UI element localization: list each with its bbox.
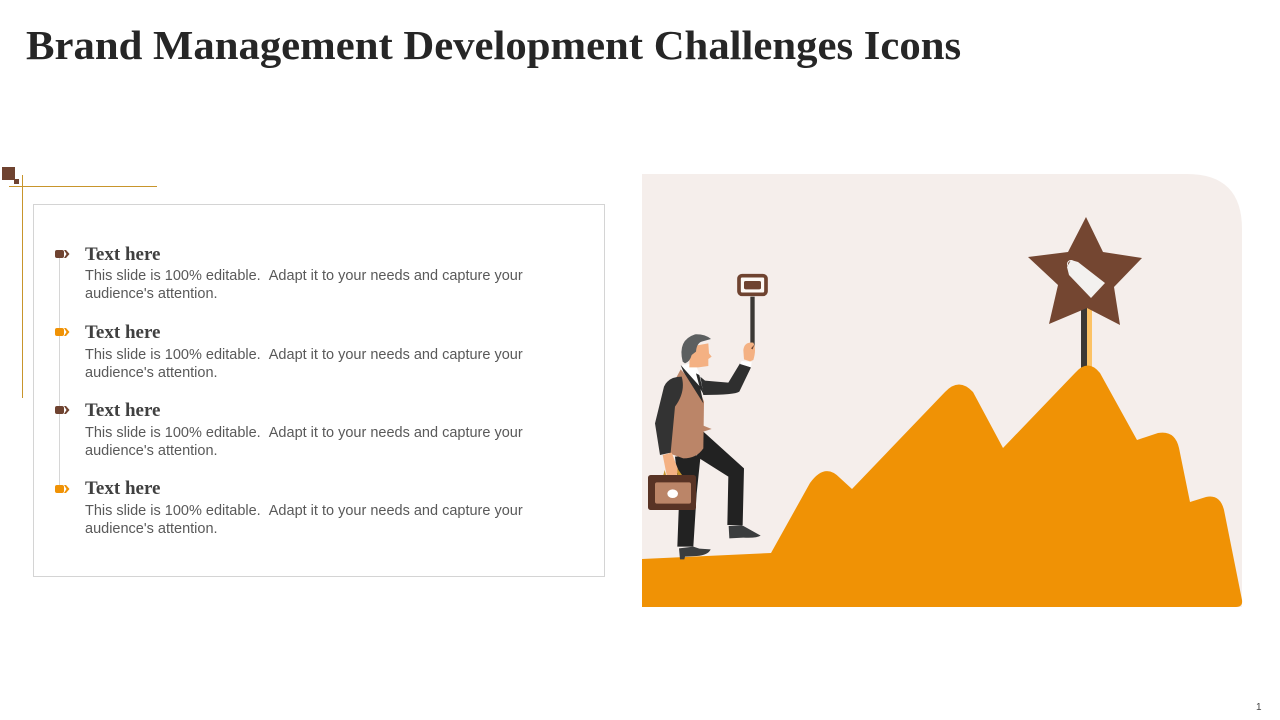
cuff <box>740 361 752 367</box>
item 4 text: This slide is 100% editable. Adapt it to your needs and capture your <box>85 503 523 519</box>
item 3 text <box>85 425 523 459</box>
title: Brand Management Development Challenges Icons <box>26 22 961 68</box>
raised hand <box>743 343 755 361</box>
bullet icon 1 <box>55 250 70 258</box>
item 1 heading: Text here <box>85 244 160 265</box>
item 1 text: audience's attention. <box>85 286 218 302</box>
front leg <box>697 432 744 525</box>
vest <box>668 369 704 458</box>
illustration background panel <box>642 174 1242 607</box>
back leg <box>675 455 701 547</box>
item 4 text: audience's attention. <box>85 521 218 537</box>
raised arm <box>698 363 751 395</box>
item 4 heading: Text here <box>85 478 160 499</box>
corner accent decoration <box>2 167 157 398</box>
star flag pole <box>1081 305 1092 375</box>
item 2 text: audience's attention. <box>85 365 218 381</box>
hair <box>681 334 711 363</box>
item 2 heading: Text here <box>85 322 160 343</box>
item 1 text: This slide is 100% editable. Adapt it to your needs and capture your <box>85 268 523 284</box>
businessman holding sign and briefcase <box>648 276 766 559</box>
bullet icon 2 <box>55 328 70 336</box>
front shoe <box>729 525 761 538</box>
item 2 text <box>85 347 523 381</box>
timeline connector <box>59 258 60 490</box>
item 4 text <box>85 503 523 537</box>
item 3 heading: Text here <box>85 400 160 421</box>
lapel <box>681 365 703 403</box>
lower hand <box>663 453 678 475</box>
panel: text list <box>33 204 605 577</box>
orange mountains <box>642 366 1242 607</box>
item 1 text <box>85 268 523 302</box>
briefcase <box>648 468 696 510</box>
neck and shirt <box>682 363 703 393</box>
back arm <box>655 377 683 455</box>
bullet icon 4 <box>55 485 70 493</box>
star icon with price tag <box>1028 217 1142 325</box>
sign <box>739 276 766 294</box>
head <box>689 343 712 367</box>
item 3 text: audience's attention. <box>85 443 218 459</box>
item 3 text: This slide is 100% editable. Adapt it to your needs and capture your <box>85 425 523 441</box>
page number: 1 <box>1256 702 1262 713</box>
item 2 text: This slide is 100% editable. Adapt it to your needs and capture your <box>85 347 523 363</box>
bullet icon 3 <box>55 406 70 414</box>
back shoe <box>679 547 711 559</box>
sign pole <box>750 297 755 347</box>
